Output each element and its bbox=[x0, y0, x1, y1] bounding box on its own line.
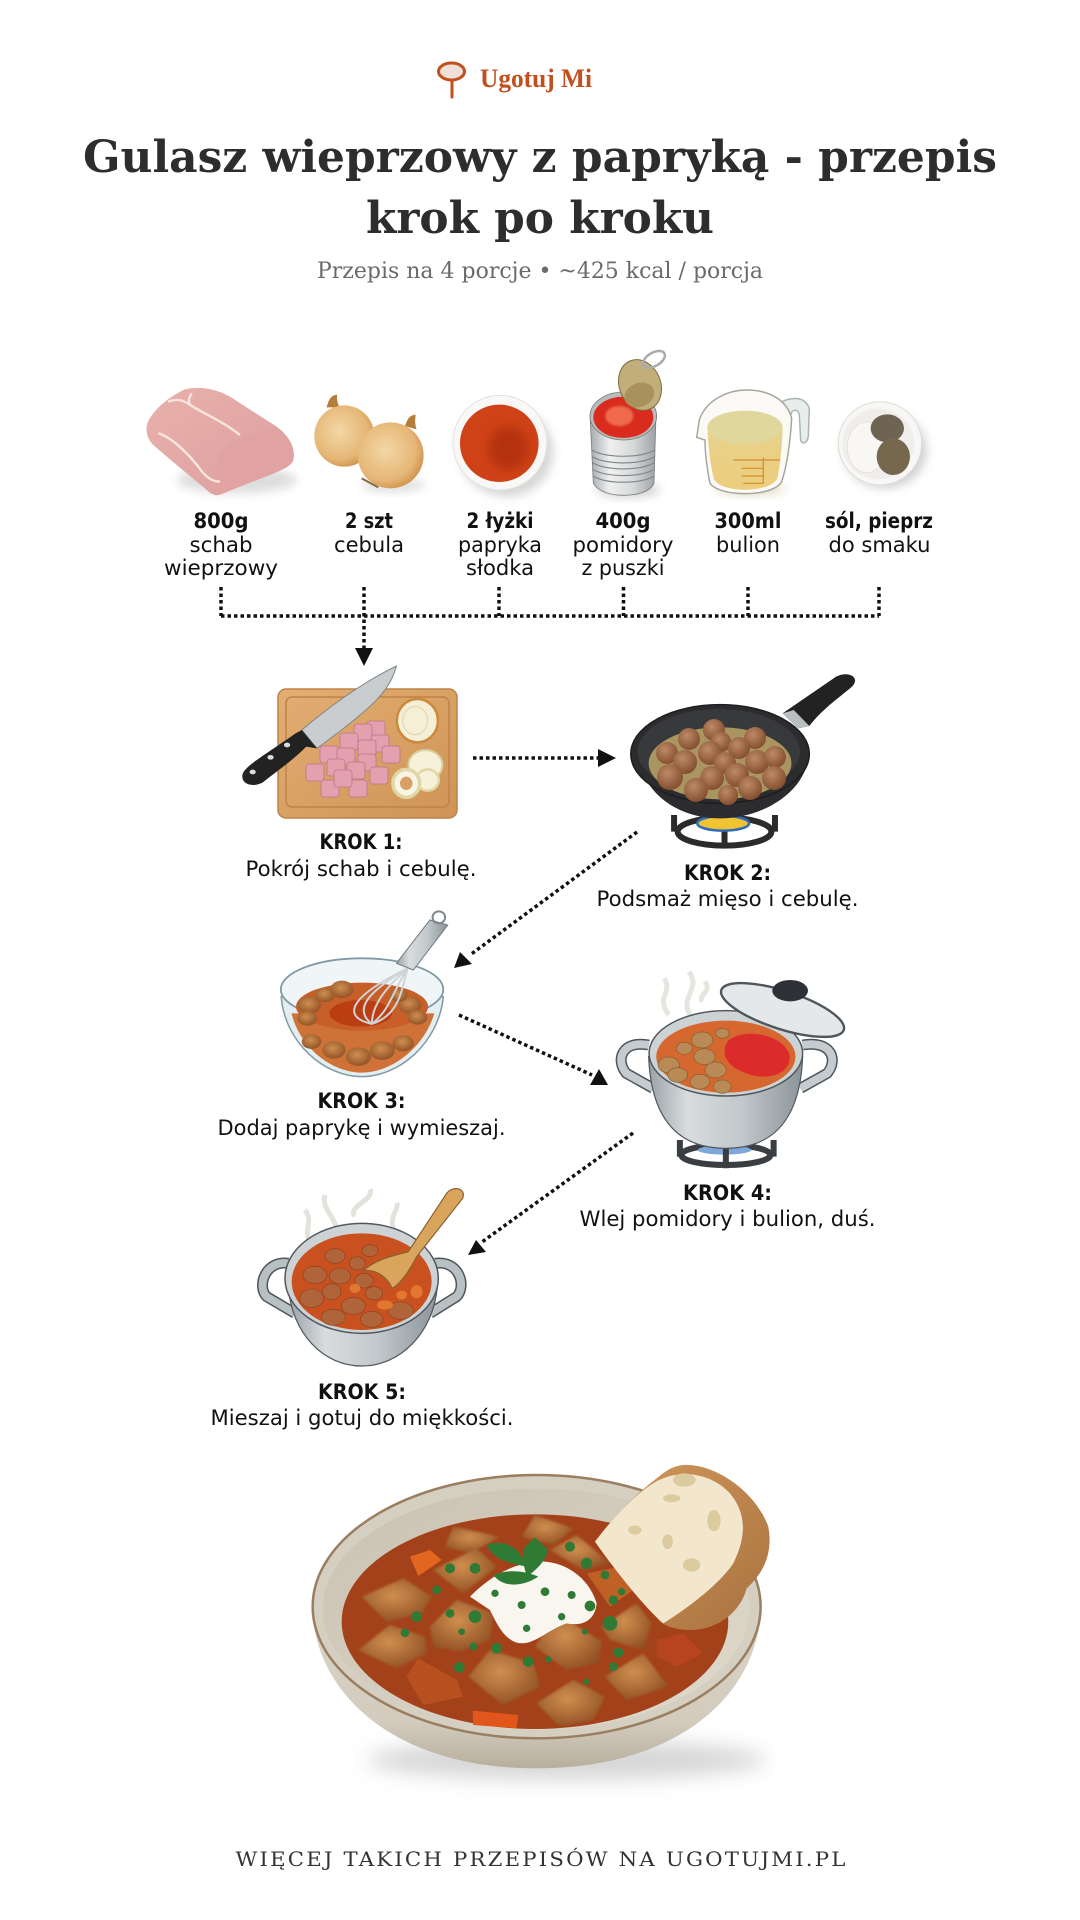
label: step 4: Wlej pomidory i bulion, duś. bbox=[580, 1207, 876, 1231]
label: salt and pepper bbox=[825, 509, 933, 557]
icon: cutting board with knife bbox=[242, 666, 457, 818]
label: step 2: Podsmaż mięso i cebulę. bbox=[596, 887, 858, 911]
label: step 4 bbox=[580, 1181, 876, 1231]
footer: WIĘCEJ TAKICH PRZEPISÓW NA UGOTUJMI.PL bbox=[236, 1846, 848, 1871]
arrow: step 4 to step 5 bbox=[468, 1133, 633, 1255]
label: step 5: Mieszaj i gotuj do miękkości. bbox=[210, 1406, 514, 1430]
label: onion: cebula bbox=[334, 533, 404, 557]
label: paprika bbox=[458, 509, 542, 580]
icon: pot with goulash and wooden spoon bbox=[262, 1189, 463, 1366]
icon: spoon pin bbox=[438, 63, 464, 97]
label: onion bbox=[334, 509, 404, 557]
label: step 1: Pokrój schab i cebulę. bbox=[246, 857, 476, 881]
label: step 5: KROK 5: bbox=[318, 1380, 406, 1404]
arrow: step 3 to step 4 bbox=[459, 1015, 608, 1085]
label: salt and pepper: sól, pieprz bbox=[825, 509, 933, 533]
arrow: step 1 to step 2 bbox=[473, 749, 616, 767]
stew bbox=[342, 1514, 728, 1729]
panel: step 3 bbox=[218, 911, 506, 1140]
icon: tomato can bbox=[590, 348, 669, 497]
label: onion: 2 szt bbox=[345, 509, 393, 533]
label: tomatoes: 400g bbox=[596, 509, 650, 533]
panel: step 2 bbox=[596, 674, 858, 911]
label: broth: 300ml bbox=[714, 509, 782, 533]
label: pork: schab bbox=[190, 533, 252, 557]
label: broth bbox=[714, 509, 782, 557]
brand name: Ugotuj Mi bbox=[480, 64, 592, 93]
panel: step 5 bbox=[210, 1189, 514, 1430]
panel: step 1 bbox=[242, 666, 476, 881]
label: paprika: papryka bbox=[458, 533, 542, 557]
title: krok po kroku bbox=[366, 193, 714, 244]
label: tomatoes bbox=[572, 509, 674, 580]
icon: onions bbox=[314, 395, 425, 492]
logo bbox=[438, 63, 592, 97]
icon: broth measuring jug bbox=[697, 390, 809, 495]
icon: salt and pepper dish bbox=[838, 402, 927, 488]
icon: stock pot with lid on burner bbox=[621, 972, 854, 1168]
illustration: finished goulash in bowl with bread bbox=[313, 1465, 770, 1780]
label: tomatoes: z puszki bbox=[582, 556, 664, 580]
label: step 3 bbox=[218, 1089, 506, 1140]
bowl shadow bbox=[367, 1740, 767, 1780]
label: step 2 bbox=[596, 861, 858, 911]
label: tomatoes: pomidory bbox=[572, 533, 674, 557]
arrow: step 2 to step 3 bbox=[454, 832, 637, 968]
label: pork: 800g bbox=[194, 509, 248, 533]
icon: glass bowl with whisk bbox=[281, 911, 448, 1077]
title bbox=[83, 132, 997, 244]
bowl bbox=[313, 1475, 761, 1768]
label: paprika: 2 łyżki bbox=[466, 509, 534, 533]
label: step 3: KROK 3: bbox=[318, 1089, 406, 1113]
panel: ingredients bbox=[147, 348, 933, 580]
parsley garnish bbox=[401, 1537, 625, 1685]
icon: paprika bowl bbox=[453, 395, 553, 497]
subtitle: Przepis na 4 porcje • ~425 kcal / porcja bbox=[317, 259, 763, 284]
label: step 1 bbox=[246, 830, 476, 881]
title: Gulasz wieprzowy z papryką - przepis bbox=[83, 132, 997, 183]
icon: frying pan on burner bbox=[631, 674, 855, 847]
panel: step 4 bbox=[580, 972, 876, 1231]
label: pork: wieprzowy bbox=[164, 556, 278, 580]
icon: pork loin bbox=[147, 388, 297, 495]
label: step 3: Dodaj paprykę i wymieszaj. bbox=[218, 1116, 506, 1140]
label: step 2: KROK 2: bbox=[684, 861, 771, 885]
label: step 1: KROK 1: bbox=[320, 830, 402, 854]
label: paprika: słodka bbox=[466, 556, 534, 580]
arrow: ingredients bracket to step 1 bbox=[221, 587, 879, 666]
label: salt and pepper: do smaku bbox=[828, 533, 930, 557]
label: broth: bulion bbox=[716, 533, 780, 557]
sour cream bbox=[470, 1562, 597, 1643]
label: pork bbox=[164, 509, 278, 580]
label: step 4: KROK 4: bbox=[683, 1181, 772, 1205]
bread bbox=[595, 1465, 770, 1630]
label: step 5 bbox=[210, 1380, 514, 1430]
